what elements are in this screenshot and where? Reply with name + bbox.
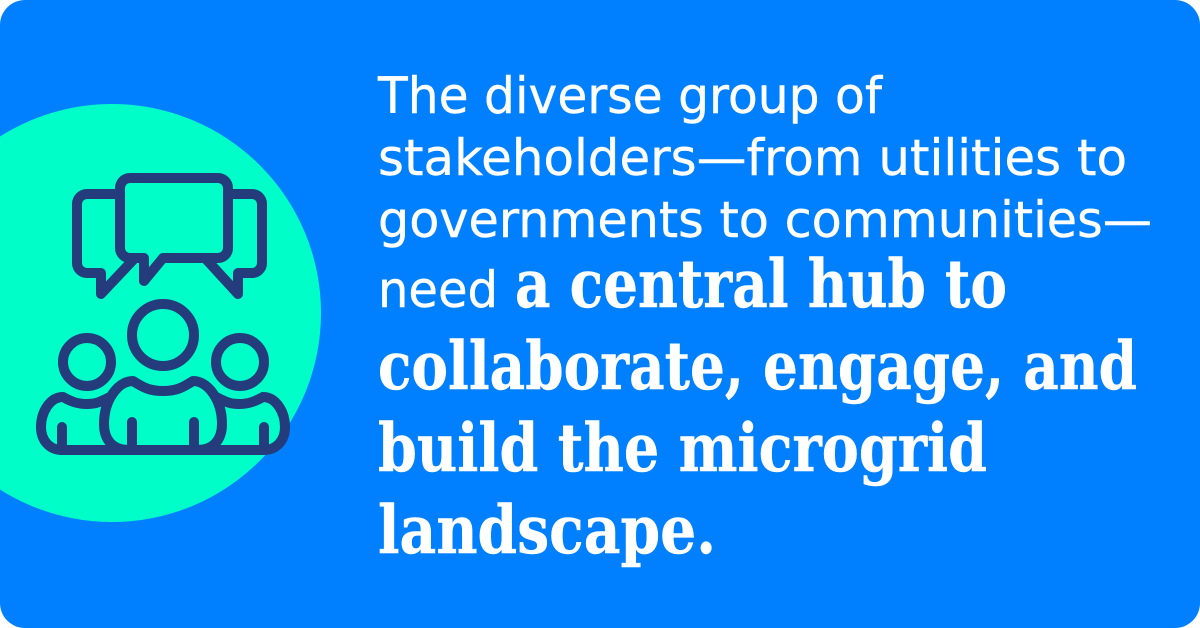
icon: left person xyxy=(41,338,128,450)
text block: main statement: build the microgrid xyxy=(378,409,987,487)
text block: main statement: stakeholders—from utilities to xyxy=(378,129,1127,187)
text block: main statement: landscape. xyxy=(378,491,716,569)
icon: right speech bubble xyxy=(205,194,262,294)
teal circle behind icon xyxy=(0,104,321,522)
icon: center speech bubble xyxy=(120,178,228,281)
icon: right person xyxy=(198,338,285,450)
text block: main statement: The diverse group of xyxy=(377,67,883,125)
text block: main statement: need xyxy=(378,261,498,319)
icon: left speech bubble xyxy=(77,194,134,294)
icon: group of people with speech bubbles xyxy=(41,178,285,450)
text block: main statement: a central hub to xyxy=(515,245,1007,323)
text block: main statement xyxy=(377,67,1152,569)
text block: main statement: governments to communities— xyxy=(378,191,1152,249)
icon: center person xyxy=(104,304,222,450)
